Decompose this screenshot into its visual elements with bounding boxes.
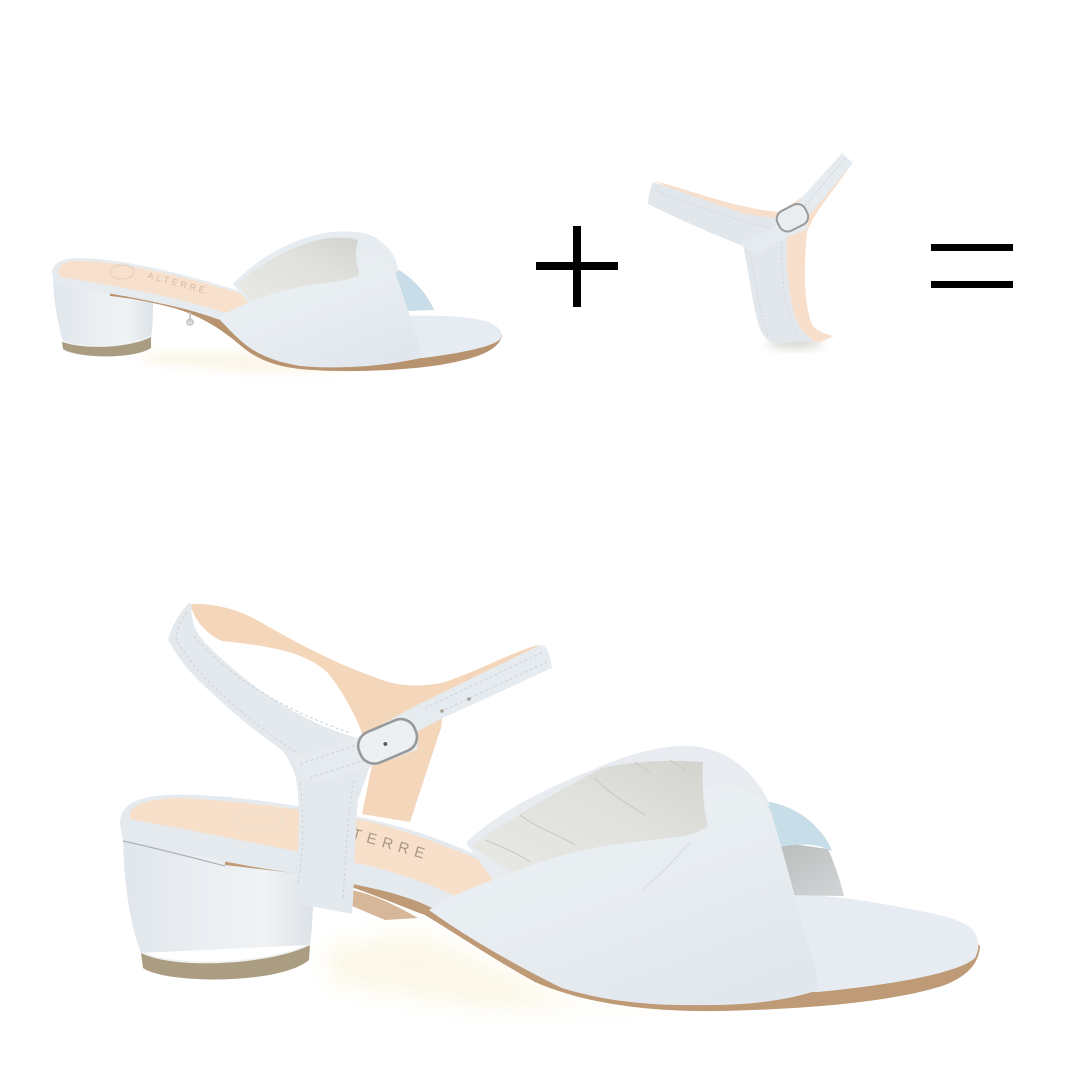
strap ground shadow	[767, 339, 823, 347]
strap holes	[440, 709, 444, 713]
strap leather band	[648, 182, 815, 343]
mule pin	[187, 312, 193, 325]
mule peach insole	[58, 261, 262, 316]
strap stitch lines	[655, 158, 846, 336]
mule insole logo	[110, 265, 134, 279]
mule blue back knot	[375, 262, 434, 311]
sandal blue back knot	[755, 800, 832, 851]
sandal front buckle strap	[292, 645, 552, 783]
equals sign	[931, 244, 1013, 288]
sandal ground shadow	[325, 930, 680, 1010]
mule ground shadow	[140, 352, 360, 372]
sandal twisted upper	[429, 785, 818, 1005]
sandal grey inside of strap	[765, 840, 844, 896]
mule outer lining rim	[233, 231, 398, 305]
mule insole brand text: ALTERRE	[146, 270, 209, 296]
sandal peach back strap lining	[190, 604, 542, 822]
mule twisted upper	[218, 254, 421, 367]
sandal insole brand text: TERRE	[350, 826, 432, 864]
sandal toe bed	[770, 893, 978, 992]
sandal upper crease	[642, 842, 690, 890]
sandal platform rim	[120, 795, 530, 920]
mule insole platform	[52, 258, 262, 325]
mule sole and shank	[110, 292, 502, 371]
sandal back strap and vertical tab	[168, 603, 370, 914]
sandal heel edge line	[123, 841, 225, 866]
top centre: detachable strap	[648, 153, 853, 347]
bottom: combined sandal	[120, 603, 980, 1011]
sandal lining wrinkles	[485, 760, 685, 862]
strap front tongue	[741, 153, 853, 256]
sandal arch underside	[352, 890, 418, 920]
sandal insole logo	[234, 811, 282, 829]
sandal peach insole	[130, 798, 525, 905]
mule grey lining	[237, 238, 362, 305]
mule toe bed	[395, 316, 501, 358]
sandal grey lining	[471, 761, 712, 885]
buckle	[354, 714, 422, 768]
sandal heel block	[123, 830, 314, 979]
stitching on back strap	[176, 612, 354, 900]
sandal outer lining rim	[466, 746, 770, 890]
mule heel	[53, 278, 153, 356]
strap buckle	[774, 201, 811, 235]
strap peach lining	[655, 166, 850, 342]
sandal shank and sole	[225, 860, 980, 1011]
top left: mule shoe	[52, 231, 502, 372]
plus sign	[536, 226, 618, 307]
